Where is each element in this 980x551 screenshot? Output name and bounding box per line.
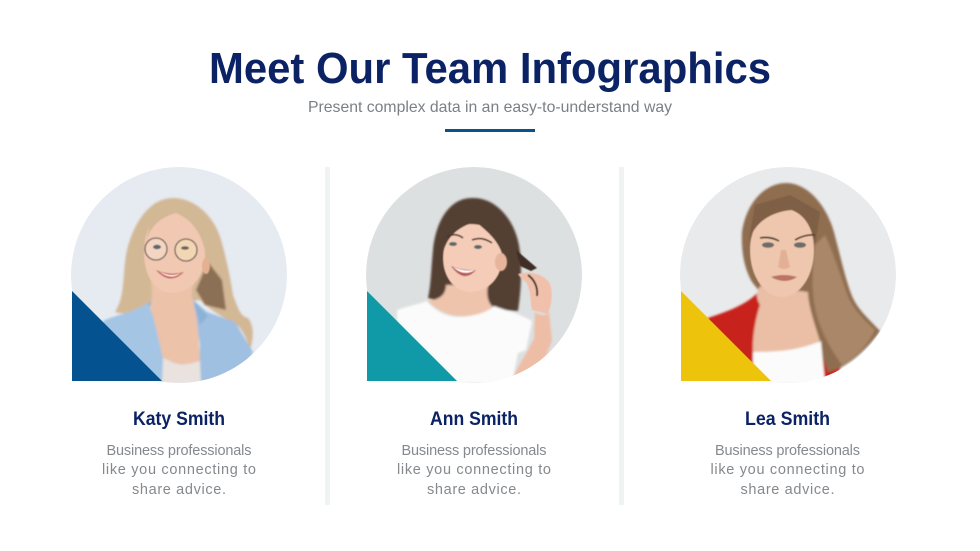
description: Katy Smith [102,443,256,498]
description: Ann Smith: share advice. [427,482,521,498]
divider right [619,167,624,505]
name: Ann Smith: Ann Smith [430,409,518,430]
panel: Lea Smith [680,167,896,498]
subtitle: Present complex data in an easy-to-understand way [308,99,672,116]
description: Ann Smith: Business professionals [402,443,546,459]
title: Meet Our Team Infographics [209,44,771,93]
portrait: Katy Smith [71,167,287,383]
triangle: yellow [681,291,771,381]
triangle: teal [367,291,457,381]
description: Ann Smith: like you connecting to [397,462,551,478]
description: Lea Smith: like you connecting to [710,462,864,478]
description: Lea Smith: share advice. [740,482,834,498]
divider left [325,167,330,505]
description: Lea Smith: Business professionals [715,443,860,459]
portrait: Ann Smith [366,167,582,385]
description: Lea Smith [710,443,864,498]
description: Katy Smith: like you connecting to [102,462,256,478]
triangle: blue [72,291,162,381]
name: Katy Smith: Katy Smith [133,409,225,430]
description: Katy Smith: Business professionals [106,443,252,459]
panel: Ann Smith [366,167,582,498]
title underline [445,129,535,132]
description: Ann Smith [397,443,551,498]
portrait: Lea Smith [680,167,896,383]
description: Katy Smith: share advice. [132,482,226,498]
panel: Katy Smith [71,167,287,498]
name: Lea Smith: Lea Smith [745,409,830,430]
